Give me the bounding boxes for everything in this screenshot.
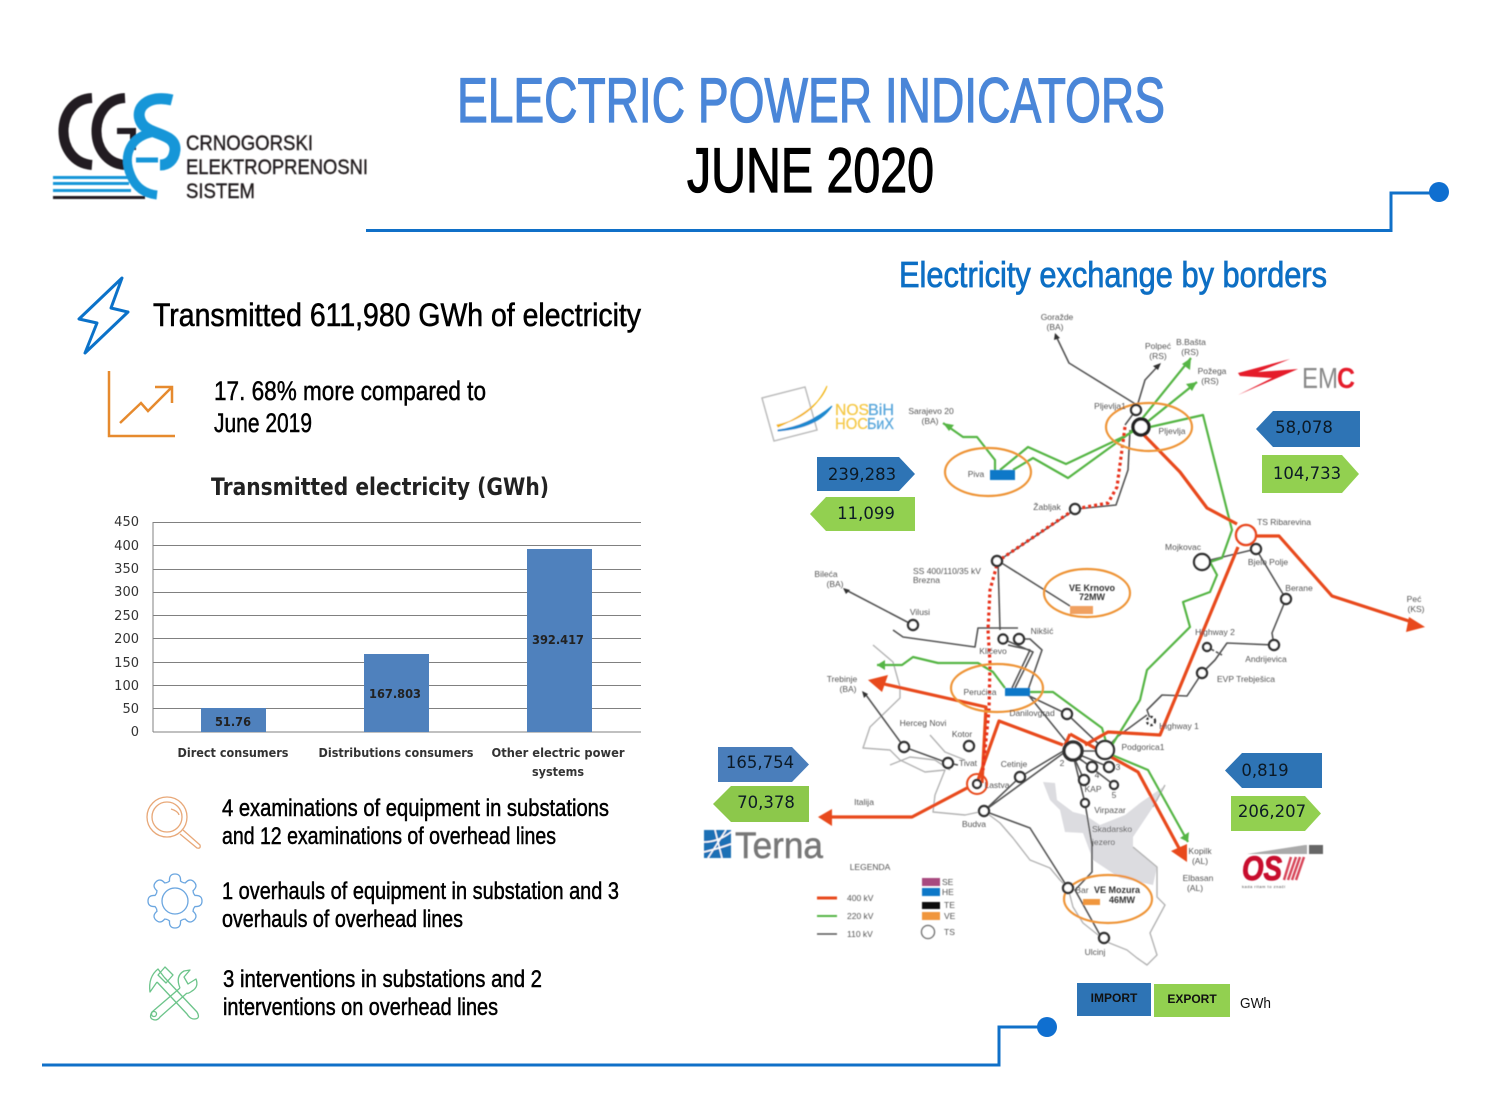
- text: examinations: and 12 examinations of overhead lines: [222, 823, 556, 850]
- map labels: (AL): [1187, 883, 1203, 893]
- y axis labels: 0: [131, 725, 139, 740]
- map labels: (BA): [840, 684, 857, 694]
- category labels: Direct consumers: [178, 746, 288, 760]
- legend: import: IMPORT: [1091, 991, 1138, 1005]
- map labels: Sarajevo 20: [908, 406, 954, 416]
- map labels: 46MW: [1109, 895, 1136, 905]
- logo: EMC: EM: [1302, 363, 1338, 395]
- map labels: EVP Trebješica: [1217, 674, 1275, 684]
- map labels: 2: [1060, 758, 1065, 768]
- map labels: Danilovgrad: [1009, 708, 1055, 718]
- heading: transmitted electricity: Transmitted 611,980 GWh of electricity: [153, 297, 641, 333]
- 400 kV lines: [828, 432, 1412, 850]
- map labels: Žabljak: [1033, 502, 1061, 512]
- text: interventions: 3 interventions in substations and 2: [223, 966, 542, 993]
- title: ELECTRIC POWER INDICATORS: [457, 66, 1165, 136]
- text: interventions: [223, 966, 542, 1021]
- map labels: VE Mozura: [1094, 885, 1141, 895]
- exchange tag: EMC import: 58,078: [1275, 418, 1333, 437]
- map labels: (AL): [1192, 856, 1208, 866]
- map labels: Berane: [1285, 583, 1313, 593]
- map labels: VE Krnovo: [1069, 583, 1116, 593]
- map labels: Cetinje: [1001, 759, 1027, 769]
- map labels: Highway 2: [1195, 627, 1235, 637]
- text: interventions: interventions on overhead lines: [223, 994, 498, 1021]
- logo: CGES: ELEKTROPRENOSNI: [186, 156, 368, 179]
- logo: NOSBiH: НОС: [835, 416, 868, 433]
- text: examinations: [222, 795, 609, 850]
- text: overhauls: overhauls of overhead lines: [222, 906, 463, 933]
- 400 kV planned line (dotted): [983, 427, 1125, 770]
- map labels: (KS): [1408, 604, 1425, 614]
- logo: CGES: [53, 98, 368, 203]
- legend: export: [1154, 984, 1230, 1017]
- map labels: jezero: [1091, 837, 1115, 847]
- chart title: Transmitted electricity (GWh): [211, 473, 549, 501]
- map labels: Italija: [854, 797, 874, 807]
- country border: [863, 645, 1165, 965]
- map labels: Bar: [1075, 885, 1089, 895]
- exchange tag: OST export: 206,207: [1238, 802, 1306, 821]
- map labels: Lastva: [984, 780, 1010, 790]
- icon: magnifier: [147, 797, 200, 848]
- map labels: Podgorica1: [1121, 742, 1165, 752]
- 110 kV lines: [846, 336, 1286, 935]
- legend: export: EXPORT: [1167, 992, 1217, 1006]
- logo: NOSBiH: БиХ: [867, 416, 894, 433]
- map labels: Peć: [1407, 594, 1422, 604]
- bar values: 392.417: [532, 633, 584, 647]
- y axis labels: 50: [122, 702, 139, 717]
- exchange tag: OST export: [1231, 796, 1321, 831]
- exchange tag: NOSBiH export: 11,099: [837, 504, 895, 523]
- map labels: (BA): [1046, 322, 1064, 332]
- legend: TE: [944, 900, 955, 910]
- y axis labels: 200: [114, 632, 139, 647]
- bars: [201, 549, 592, 732]
- map labels: (BA): [922, 416, 939, 426]
- map: power network: [814, 312, 1425, 965]
- logo: NOSBiH: NOS: [835, 402, 869, 419]
- plant markers: [990, 470, 1100, 905]
- map labels: (BA): [826, 579, 844, 589]
- exchange tag: NOSBiH import: 239,283: [828, 465, 896, 484]
- map labels: Herceg Novi: [900, 718, 946, 728]
- logo: NOSBiH: BiH: [868, 402, 894, 419]
- map labels: Vilusi: [910, 607, 930, 617]
- map labels: Perućica: [963, 687, 997, 697]
- map labels: (RS): [1181, 347, 1199, 357]
- plant ellipses: [945, 403, 1192, 923]
- category labels: [178, 746, 625, 779]
- logo: CGES: SISTEM: [186, 180, 255, 203]
- map labels: Bileća: [814, 569, 838, 579]
- map labels: 5: [1112, 790, 1117, 800]
- y axis labels: 300: [114, 585, 139, 600]
- map labels: 3: [1116, 762, 1121, 772]
- category labels: Distributions consumers: [318, 746, 474, 760]
- 220 kV lines: [877, 358, 1232, 842]
- logo: EMC: C: [1337, 363, 1355, 395]
- logo: OST: OS: [1242, 850, 1282, 888]
- map labels: Klićevo: [979, 646, 1007, 656]
- text: overhauls: [222, 878, 619, 933]
- map labels: Mojkovac: [1165, 542, 1202, 552]
- map labels: Elbasan: [1183, 873, 1214, 883]
- logo: Terna: Terna: [735, 825, 823, 866]
- exchange tag: EMC export: [1262, 455, 1359, 493]
- logo: OST: kada ritam to znači: [1242, 884, 1285, 889]
- map labels: Piva: [968, 469, 985, 479]
- map labels: Polpeć: [1145, 341, 1172, 351]
- exchange tag: OST import: [1225, 753, 1322, 788]
- connector line: top: [366, 182, 1449, 230]
- map labels: 4: [1095, 770, 1100, 780]
- legend: LEGENDA: [850, 862, 891, 872]
- exchange tag: Terna export: [713, 786, 809, 822]
- map labels: TS Ribarevina: [1257, 517, 1311, 527]
- map labels: Kopilk: [1188, 846, 1212, 856]
- map labels: 72MW: [1079, 592, 1106, 602]
- exchange tag: Terna import: [718, 747, 809, 782]
- y axis labels: 150: [114, 656, 139, 671]
- logo: CGES: CRNOGORSKI: [186, 132, 313, 155]
- map labels: Tivat: [959, 758, 978, 768]
- map labels: Bjelo Polje: [1248, 557, 1288, 567]
- bar values: [215, 633, 584, 729]
- legend: HE: [942, 887, 954, 897]
- y axis labels: 250: [114, 609, 139, 624]
- arrowheads: [818, 333, 1425, 862]
- icon: lightning bolt: [79, 278, 128, 353]
- map labels: Highway 1: [1159, 721, 1199, 731]
- icon: hammer and wrench: [150, 967, 198, 1020]
- exchange tag: Terna export: 70,378: [737, 793, 795, 812]
- map labels: Ulcinj: [1085, 947, 1106, 957]
- exchange tag: EMC import: [1256, 411, 1360, 447]
- map labels: Budva: [962, 819, 986, 829]
- text: examinations: 4 examinations of equipment in substations: [222, 795, 609, 822]
- legend: 110 kV: [847, 929, 873, 939]
- map labels: Goražde: [1041, 312, 1074, 322]
- logo: EMC: [1238, 359, 1355, 395]
- map labels: Trebinje: [827, 674, 857, 684]
- text: growth compared to June 2019: [214, 376, 486, 438]
- subtitle: date: JUNE 2020: [687, 136, 934, 206]
- exchange tag: OST import: 0,819: [1241, 761, 1289, 780]
- connector line: bottom: [42, 1017, 1057, 1065]
- map labels: Kotor: [952, 729, 972, 739]
- text: growth compared to June 2019: 17. 68% more compared to: [214, 376, 486, 406]
- map labels: SS 400/110/35 kV: [913, 566, 981, 576]
- map labels: KAP: [1084, 784, 1102, 794]
- map labels: Pljevlja1: [1094, 401, 1126, 411]
- legend: [817, 862, 956, 939]
- exchange tag: EMC export: 104,733: [1273, 464, 1341, 483]
- legend: 400 kV: [847, 893, 874, 903]
- y axis labels: [114, 515, 139, 740]
- legend: SE: [942, 877, 954, 887]
- legend: VE: [944, 911, 956, 921]
- legend: unit: GWh: [1240, 995, 1271, 1012]
- substations: [899, 405, 1291, 943]
- icon: gear: [148, 874, 202, 928]
- map labels: Virpazar: [1094, 805, 1126, 815]
- map labels: Brezna: [913, 575, 940, 585]
- map labels: Pljevlja: [1159, 426, 1186, 436]
- map labels: Nikšić: [1031, 626, 1054, 636]
- exchange tag: NOSBiH export: [810, 497, 915, 531]
- exchange tag: NOSBiH import: [817, 457, 915, 491]
- bar chart: transmitted electricity: [114, 473, 641, 779]
- legend: import: [1077, 983, 1151, 1016]
- category labels: Other electric power: [492, 746, 625, 760]
- map labels: Skadarsko: [1092, 824, 1132, 834]
- text: overhauls: 1 overhauls of equipment in substation and 3: [222, 878, 619, 905]
- map labels: (RS): [1201, 376, 1219, 386]
- bar values: 167.803: [369, 687, 421, 701]
- map labels: Andrijevica: [1245, 654, 1287, 664]
- heading: electricity exchange: Electricity exchange by borders: [899, 254, 1327, 295]
- y axis labels: 100: [114, 679, 139, 694]
- logo: OST: [1242, 845, 1323, 889]
- y axis labels: 450: [114, 515, 139, 530]
- legend: 220 kV: [847, 911, 874, 921]
- y axis labels: 400: [114, 539, 139, 554]
- map labels: B.Bašta: [1176, 337, 1206, 347]
- icon: growth chart: [109, 371, 175, 436]
- text: growth compared to June 2019: June 2019: [214, 408, 312, 438]
- logo: NOSBiH: [762, 386, 894, 441]
- map labels: (RS): [1149, 351, 1167, 361]
- lake: [1043, 782, 1163, 885]
- exchange tag: Terna import: 165,754: [726, 753, 794, 772]
- bar values: 51.76: [215, 715, 251, 729]
- y axis labels: 350: [114, 562, 139, 577]
- map labels: Požega: [1198, 366, 1227, 376]
- category labels: systems: [532, 765, 584, 779]
- map labels: [814, 312, 1425, 957]
- legend: TS: [944, 927, 955, 937]
